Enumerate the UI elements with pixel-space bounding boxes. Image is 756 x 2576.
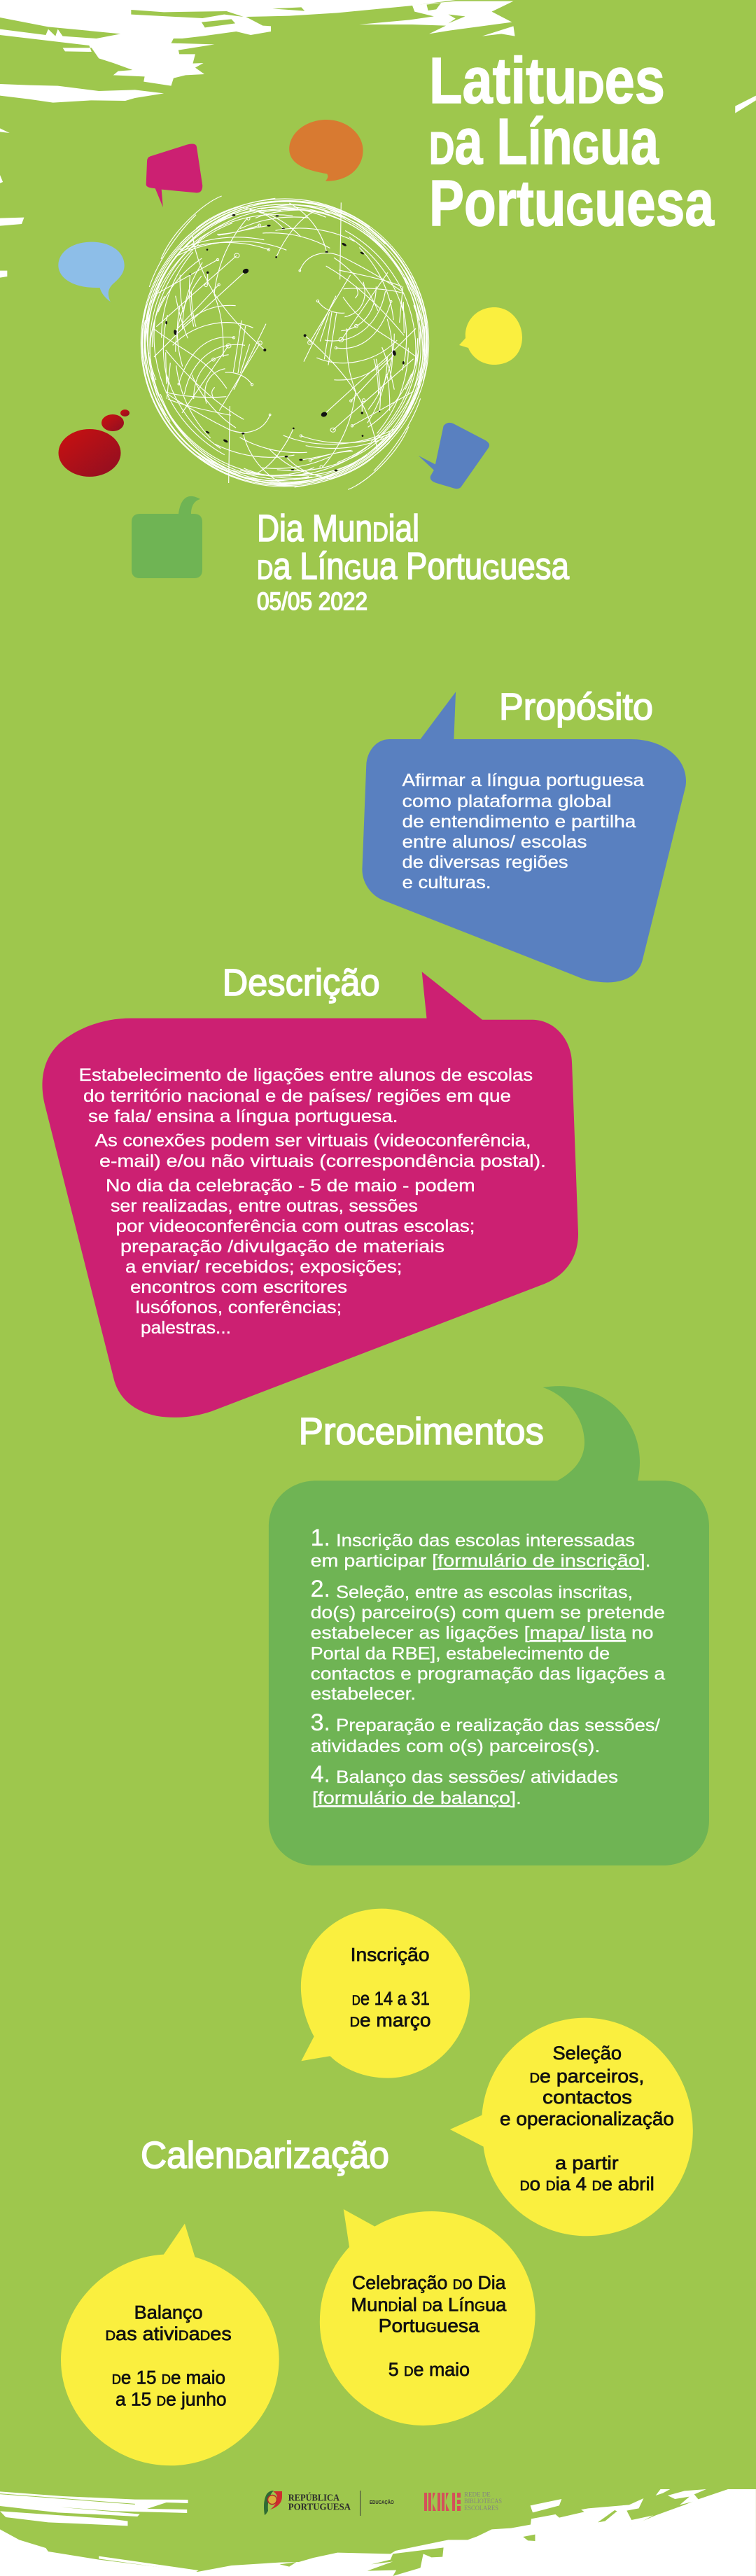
- callout text: Seleção dates: contactos: [542, 2087, 632, 2108]
- wordmark: [464, 2492, 502, 2512]
- icon: orange speech bubble: [289, 120, 363, 181]
- text block: description: No dia da celebração - 5 de maio - podem: [106, 1176, 475, 1196]
- text block: description: Estabelecimento de ligações entre alunos de escolas: [79, 1065, 533, 1085]
- subtitle: Dia Mundial da Língua Portuguesa and date: [257, 507, 570, 615]
- text block: description: por videoconferência com outras escolas;: [116, 1217, 475, 1236]
- subtitle: Dia Mundial da Língua Portuguesa and date: 05/05 2022: [257, 588, 368, 615]
- icon: yellow speech bubble: [459, 307, 522, 365]
- wordmark: [288, 2492, 351, 2513]
- heading: Calendarização: Calendarização: [141, 2134, 389, 2176]
- logo: Rede de Bibliotecas Escolares: [424, 2492, 502, 2512]
- text block: step 2: contactos e programação das ligações a: [311, 1665, 665, 1684]
- callout text: Celebração date: Portuguesa: [379, 2316, 480, 2337]
- text block: description: e-mail) e/ou não virtuais (correspondência postal).: [99, 1152, 546, 1171]
- subtitle: Dia Mundial da Língua Portuguesa and date: da Língua Portuguesa: [257, 545, 570, 587]
- callout text: Balanço dates: das atividades: [105, 2323, 232, 2344]
- text block: step 4: [311, 1761, 618, 1808]
- title: da Língua: [429, 105, 659, 178]
- callout text: Seleção dates: Seleção: [553, 2043, 622, 2064]
- text block: description: encontros com escritores: [130, 1278, 347, 1297]
- text block: step 1: [311, 1525, 651, 1571]
- top white brush stroke: [0, 0, 756, 286]
- text block: description: a enviar/ recebidos; exposições;: [125, 1257, 402, 1277]
- subtitle: Dia Mundial da Língua Portuguesa and date: Dia Mundial: [257, 507, 419, 550]
- callout text: Celebração date: Celebração do Dia: [352, 2272, 506, 2293]
- wordmark: PORTUGUESA: [288, 2502, 351, 2513]
- callout text: Inscrição dates: [350, 1945, 431, 2031]
- text block: description: do território nacional e de países/ regiões em que: [83, 1086, 511, 1106]
- icon: green speech bubble: [132, 496, 202, 578]
- callout text: Celebração date: Mundial da Língua: [351, 2295, 507, 2316]
- title: Latitudes: [429, 44, 665, 117]
- speech bubble: Inscrição: [301, 1909, 470, 2078]
- text block: step 2: Seleção, entre as escolas inscritas,: [336, 1583, 633, 1602]
- text block: step 2: do(s) parceiro(s) com quem se pretende: [311, 1603, 665, 1623]
- text block: description: [79, 1065, 546, 1338]
- wordmark: BIBLIOTECAS: [464, 2498, 502, 2505]
- text block: step 4: 4.: [311, 1761, 330, 1788]
- callout text: Seleção dates: [500, 2043, 674, 2194]
- callout text: Balanço dates: [105, 2302, 232, 2410]
- text block: purpose: [402, 771, 644, 892]
- speech bubble: Celebração: [320, 2209, 536, 2426]
- logo: República Portuguesa, Educação: [264, 2491, 394, 2516]
- callout text: Celebração date: 5 de maio: [388, 2359, 470, 2380]
- speech bubble: Seleção: [450, 2018, 693, 2236]
- icon: magenta speech bubble: [146, 144, 202, 207]
- text block: step 1: em participar [ formulário de inscrição ].: [311, 1551, 651, 1571]
- text block: step 2: [311, 1576, 665, 1704]
- speech bubble: green: [269, 1386, 709, 1865]
- panel: Procedimentos: [269, 1386, 709, 1865]
- label: Educação: EDUCAÇÃO: [370, 2499, 394, 2505]
- callout text: Balanço dates: de 15 de maio: [112, 2367, 225, 2388]
- callout text: Inscrição dates: de março: [350, 2010, 431, 2031]
- speech bubble: Balanço: [61, 2224, 279, 2465]
- text block: step 2: Portal da RBE], estabelecimento de: [311, 1644, 610, 1663]
- text block: purpose: de entendimento e partilha: [402, 812, 636, 832]
- text block: step 1: 1.: [311, 1525, 330, 1551]
- text block: purpose: entre alunos/ escolas: [402, 832, 587, 852]
- icon: republic shield: [264, 2491, 282, 2515]
- text block: purpose: de diversas regiões: [402, 853, 568, 872]
- text block: step 3: 3.: [311, 1709, 330, 1736]
- text block: step 4: Balanço das sessões/ atividades: [336, 1768, 618, 1787]
- speech bubble: magenta: [42, 972, 578, 1418]
- speech bubble: blue: [362, 692, 686, 982]
- heading: Descrição: Descrição: [223, 962, 380, 1004]
- wordmark: ESCOLARES: [464, 2505, 498, 2512]
- text block: step 2: estabelecer.: [311, 1684, 416, 1704]
- text block: purpose: Afirmar a língua portuguesa: [402, 771, 644, 790]
- callout text: Seleção dates: e operacionalização: [500, 2108, 674, 2129]
- text block: description: lusófonos, conferências;: [136, 1298, 342, 1317]
- text block: description: As conexões podem ser virtuais (videoconferência,: [95, 1131, 531, 1151]
- text block: step 2: 2.: [311, 1576, 330, 1602]
- panel: Descrição: [42, 962, 578, 1418]
- panel: Calendarização: [61, 1909, 693, 2465]
- text block: step 3: Preparação e realização das sessões/: [336, 1716, 660, 1735]
- text block: description: se fala/ ensina a língua portuguesa.: [88, 1107, 398, 1126]
- text block: description: preparação /divulgação de materiais: [120, 1237, 444, 1256]
- callout text: Seleção dates: a partir: [555, 2152, 619, 2174]
- panel: Propósito: [362, 686, 686, 982]
- text block: step 3: [311, 1709, 660, 1756]
- text block: purpose: como plataforma global: [402, 792, 612, 811]
- wordmark: REDE DE: [464, 2492, 491, 2499]
- callout text: Inscrição dates: Inscrição: [351, 1945, 430, 1966]
- callout text: Seleção dates: de parceiros,: [529, 2066, 644, 2087]
- text block: step 4: [formulário de balanço ].: [312, 1788, 522, 1808]
- text block: purpose: e culturas.: [402, 873, 491, 892]
- bottom white brush stroke: [0, 2489, 756, 2576]
- callout text: Inscrição dates: de 14 a 31: [352, 1988, 430, 2009]
- text block: step 1: Inscrição das escolas interessadas: [336, 1531, 635, 1550]
- text block: step 3: atividades com o(s) parceiros(s).: [311, 1737, 600, 1756]
- icon: RBE bars: [424, 2493, 461, 2511]
- heading: Procedimentos: Procedimentos: [299, 1410, 544, 1452]
- callout text: Balanço dates: a 15 de junho: [115, 2389, 227, 2410]
- heading: Propósito: Propósito: [499, 686, 653, 728]
- callout text: Balanço dates: Balanço: [134, 2302, 203, 2323]
- callout text: Celebração date: [351, 2272, 507, 2380]
- text block: step 2: estabelecer as ligações [ mapa/ lista no: [311, 1623, 654, 1643]
- text block: description: palestras...: [141, 1318, 231, 1338]
- icon: light blue speech bubble: [58, 242, 125, 302]
- icon: red thought bubbles: [59, 410, 130, 477]
- callout text: Seleção dates: do dia 4 de abril: [520, 2174, 654, 2194]
- wordmark: REPÚBLICA: [288, 2492, 340, 2504]
- text block: description: ser realizadas, entre outras, sessões: [111, 1196, 418, 1216]
- icon: dark blue speech bubble: [419, 423, 489, 489]
- globe of connected lines: [141, 196, 429, 489]
- title: Portuguesa: [429, 167, 715, 239]
- title: [429, 44, 715, 239]
